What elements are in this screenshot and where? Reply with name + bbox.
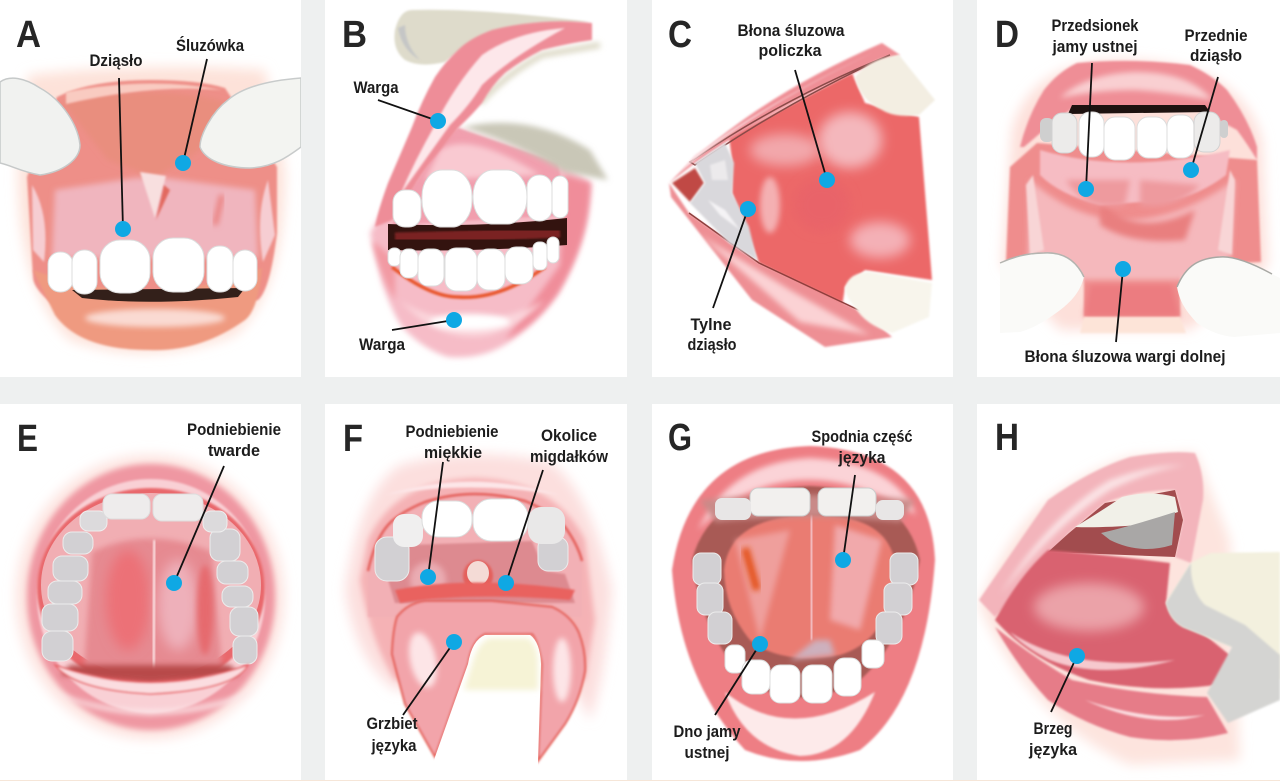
letter H: H — [995, 417, 1019, 459]
label: Brzeg języka: języka — [1028, 740, 1078, 759]
label: Przednie dziąsło — [1183, 26, 1248, 178]
label: Warga lower — [359, 312, 462, 354]
illustration: tongue held by gauze — [979, 452, 1280, 765]
label: Śluzówka — [175, 36, 244, 171]
label: Dziąsło — [90, 51, 142, 237]
label: Tylne dziąsło: dziąsło — [688, 335, 736, 354]
label: Tylne dziąsło: Tylne — [690, 315, 732, 334]
label: Okolice migdałków: migdałków — [530, 447, 609, 466]
label: Grzbiet języka: Grzbiet — [366, 714, 418, 733]
label: Dno jamy ustnej: ustnej — [684, 743, 730, 762]
panel E: hard palate — [0, 404, 301, 781]
label: Dziąsło: Dziąsło — [90, 51, 142, 70]
letter D: D — [995, 14, 1019, 56]
label: Grzbiet języka — [366, 634, 462, 755]
illustration: palate — [16, 455, 284, 739]
illustration: upper lip lifted by fingers — [0, 67, 301, 353]
label: Podniebienie miękkie — [406, 422, 498, 585]
panel H: side of tongue — [977, 404, 1280, 781]
label: Śluzówka: Śluzówka — [176, 36, 244, 55]
letter B: B — [342, 14, 367, 56]
panel F: soft palate and tongue — [325, 404, 627, 781]
label: Błona śluzowa wargi dolnej — [1024, 261, 1226, 366]
label: Przednie dziąsło: dziąsło — [1190, 46, 1242, 65]
illustration: lower lip pulled down — [1000, 60, 1280, 337]
letter C: C — [668, 14, 692, 56]
label: Okolice migdałków — [498, 426, 609, 591]
label: Tylne dziąsło — [688, 201, 756, 354]
label: Błona śluzowa policzka: policzka — [758, 41, 822, 60]
label: Spodnia część języka: Spodnia część — [812, 427, 912, 446]
letter A: A — [16, 14, 41, 56]
label: Warga upper — [354, 78, 446, 129]
label: Przednie dziąsło: Przednie — [1184, 26, 1248, 45]
letter E: E — [17, 418, 38, 460]
label: Przedsionek jamy ustnej — [1052, 16, 1139, 197]
panel C: cheek mucosa — [652, 0, 953, 377]
label: Błona śluzowa policzka: Błona śluzowa — [738, 21, 845, 40]
label: Podniebienie miękkie: Podniebienie — [406, 422, 498, 441]
label: Podniebienie twarde: Podniebienie — [187, 420, 281, 439]
label: Dno jamy ustnej: Dno jamy — [674, 722, 741, 741]
illustration: throat and tongue — [345, 454, 612, 781]
illustration: open cheek — [669, 43, 935, 347]
letter G: G — [668, 417, 692, 459]
label: Podniebienie twarde — [166, 420, 281, 591]
label: Warga lower: Warga — [359, 335, 405, 354]
label: Błona śluzowa wargi dolnej: Błona śluzowa wargi dolnej — [1024, 347, 1226, 366]
label: Przedsionek jamy ustnej: jamy ustnej — [1052, 37, 1138, 56]
label: Błona śluzowa policzka — [738, 21, 845, 188]
label: Podniebienie twarde: twarde — [208, 441, 260, 460]
panel B: lips — [325, 0, 627, 377]
label: Podniebienie miękkie: miękkie — [424, 443, 482, 462]
label: Spodnia część języka — [812, 427, 912, 568]
label: Brzeg języka — [1028, 648, 1085, 759]
label: Przedsionek jamy ustnej: Przedsionek — [1052, 16, 1139, 35]
illustration: lips and teeth — [370, 10, 608, 357]
label: Warga upper: Warga — [354, 78, 399, 97]
label: Grzbiet języka: języka — [371, 736, 417, 755]
label: Dno jamy ustnej — [674, 636, 768, 762]
panel A: gums and mucosa — [0, 0, 301, 377]
panel D: lower lip mucosa — [977, 0, 1280, 377]
letter F: F — [343, 418, 363, 460]
panel G: underside of tongue — [652, 404, 953, 781]
label: Spodnia część języka: języka — [838, 448, 886, 467]
label: Brzeg języka: Brzeg — [1034, 719, 1072, 738]
illustration: raised tongue — [672, 446, 935, 761]
label: Okolice migdałków: Okolice — [541, 426, 597, 445]
